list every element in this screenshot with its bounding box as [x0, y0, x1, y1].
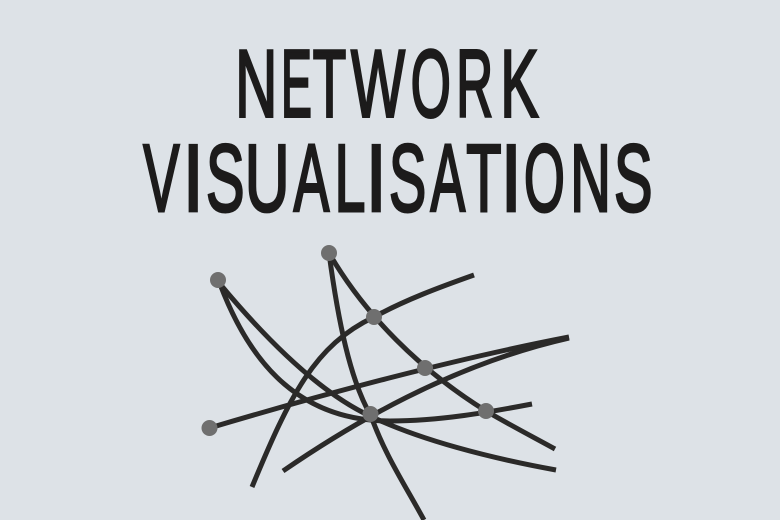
title: A — [294, 126, 330, 232]
title: K — [500, 30, 539, 137]
title: I — [501, 126, 522, 232]
network nodes — [202, 245, 494, 436]
title: T — [313, 32, 346, 137]
title: O — [524, 125, 565, 232]
title: S — [389, 124, 426, 232]
title: S — [614, 125, 652, 231]
title: O — [411, 32, 451, 138]
title: N — [570, 124, 611, 232]
title: I — [366, 126, 387, 232]
title: U — [245, 125, 289, 232]
title: T — [466, 125, 501, 231]
title: V — [143, 126, 180, 232]
title: N — [235, 30, 277, 137]
network diagram — [202, 245, 569, 520]
title: W — [351, 30, 405, 137]
title: A — [430, 125, 466, 232]
title: I — [183, 126, 204, 232]
title — [143, 30, 652, 232]
title: R — [456, 32, 493, 138]
title: L — [335, 124, 365, 232]
title: S — [206, 125, 244, 231]
network edges — [210, 253, 569, 520]
title: E — [281, 30, 312, 137]
